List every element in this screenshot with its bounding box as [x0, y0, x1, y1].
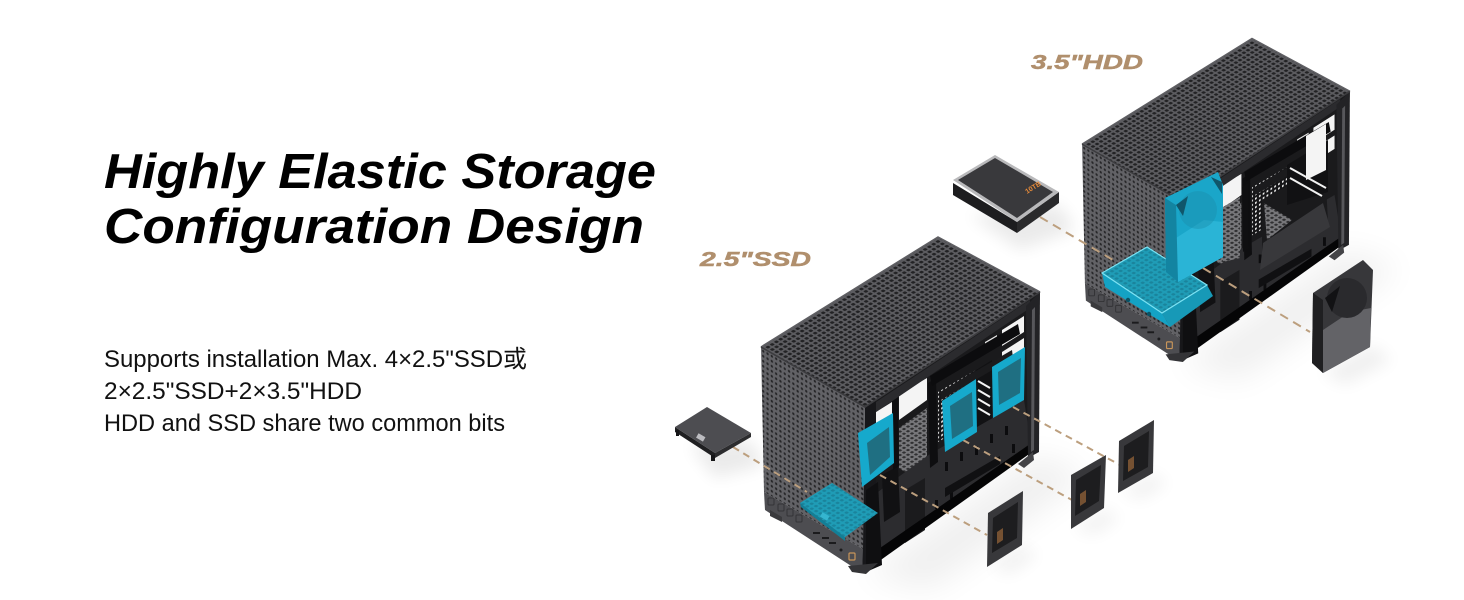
floating SSD: c [1118, 420, 1154, 493]
shadows [690, 205, 1400, 590]
floating SSD: b [1071, 455, 1106, 529]
blue installed HDD: flat [1102, 247, 1213, 327]
blue installed SSD 2 [942, 379, 977, 452]
label: 3.5 inch HDD: 3.5"HDD [1031, 52, 1143, 74]
title [104, 145, 656, 254]
description text [104, 346, 527, 437]
blue installed SSD 3 [992, 347, 1025, 418]
title: Configuration Design [104, 200, 644, 254]
floating SSD: left [675, 407, 751, 461]
blue installed SSD 1 [858, 413, 894, 487]
dashed guide lines: SSD [733, 407, 1120, 535]
HDD configuration: interior tray [1223, 124, 1330, 270]
description text: 2×2.5"SSD+2×3.5"HDD [104, 378, 362, 405]
description text: HDD and SSD share two common bits [104, 410, 505, 437]
floating SSD: a [987, 491, 1023, 567]
title: Highly Elastic Storage [104, 145, 656, 199]
blue installed HDD: vertical [1165, 172, 1223, 282]
description text: Supports installation Max. 4×2.5"SSD或 [104, 346, 527, 373]
floating HDD: right [1312, 260, 1373, 373]
dashed guide lines: HDD [1040, 217, 1310, 332]
blue installed SSD flat [800, 483, 878, 541]
floating HDD: left: 10TB [1024, 181, 1043, 196]
PC case: HDD configuration [1082, 39, 1350, 362]
label: 2.5 inch SSD: 2.5"SSD [699, 249, 811, 271]
floating HDD: left [953, 155, 1059, 233]
PC case: SSD configuration [761, 237, 1040, 574]
